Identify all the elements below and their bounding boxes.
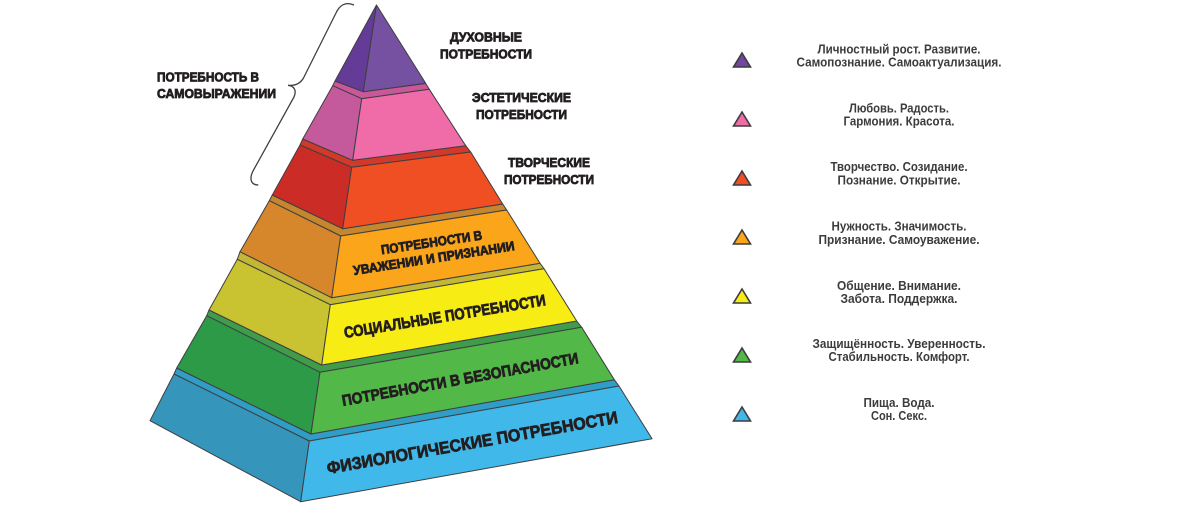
legend item: red [734, 159, 968, 188]
label: aesthetic needs: ЭСТЕТИЧЕСКИЕ [472, 90, 571, 105]
legend item: yellow: Забота. Поддержка. [840, 291, 958, 306]
legend item: red: Познание. Открытие. [838, 172, 960, 188]
legend item: blue: Пища. Вода. [864, 395, 934, 410]
legend item: orange: Признание. Самоуважение. [818, 232, 980, 247]
label: aesthetic needs [472, 90, 571, 122]
legend item: purple: Личностный рост. Развитие. [818, 42, 980, 56]
legend item: blue [734, 395, 934, 423]
brace: need for self-expression [251, 4, 354, 185]
label: aesthetic needs: ПОТРЕБНОСТИ [476, 107, 567, 122]
tier: physiological needs [150, 368, 652, 502]
legend [734, 42, 1002, 423]
tier: spiritual needs [335, 5, 426, 92]
legend item: yellow [734, 278, 961, 306]
label: need for self-expression: САМОВЫРАЖЕНИИ [157, 86, 276, 101]
label: need for self-expression: ПОТРЕБНОСТЬ В [157, 70, 259, 85]
label: creative needs: ТВОРЧЕСКИЕ [508, 155, 590, 170]
tier: esteem and recognition needs [240, 195, 540, 298]
tier: aesthetic needs [303, 81, 466, 160]
legend item: red: Творчество. Созидание. [830, 159, 968, 174]
legend item: green [734, 336, 986, 364]
label: spiritual needs: ПОТРЕБНОСТИ [440, 47, 532, 62]
legend item: yellow: Общение. Внимание. [837, 278, 961, 293]
legend item: purple: Самопознание. Самоактуализация. [796, 54, 1002, 70]
legend item: purple [734, 42, 1002, 70]
legend item: blue: Сон. Секс. [871, 408, 927, 423]
legend item: pink [734, 100, 954, 128]
label: creative needs: ПОТРЕБНОСТИ [504, 172, 594, 187]
tier: esteem and recognition needs: УВАЖЕНИИ И ПРИЗНАНИИ [352, 238, 516, 278]
tier: safety needs [177, 310, 614, 434]
legend item: orange: Нужность. Значимость. [832, 218, 966, 234]
label: spiritual needs [440, 30, 532, 62]
legend item: green: Защищённость. Уверенность. [812, 336, 986, 351]
pyramid [150, 5, 652, 502]
label: spiritual needs: ДУХОВНЫЕ [450, 30, 522, 44]
legend item: pink: Любовь. Радость. [849, 100, 949, 116]
legend item: green: Стабильность. Комфорт. [828, 349, 970, 364]
label: creative needs [504, 155, 594, 187]
label: need for self-expression [157, 70, 276, 101]
tier: social needs [209, 252, 577, 365]
legend item: orange [734, 218, 980, 247]
tier: esteem and recognition needs: ПОТРЕБНОСТИ В [380, 228, 483, 257]
tier: safety needs: ПОТРЕБНОСТИ В БЕЗОПАСНОСТИ [341, 350, 580, 410]
tier: creative needs [272, 139, 503, 229]
legend item: pink: Гармония. Красота. [844, 114, 954, 128]
tier: physiological needs: ФИЗИОЛОГИЧЕСКИЕ ПОТРЕБНОСТИ [325, 408, 619, 478]
tier: social needs: СОЦИАЛЬНЫЕ ПОТРЕБНОСТИ [343, 292, 547, 342]
